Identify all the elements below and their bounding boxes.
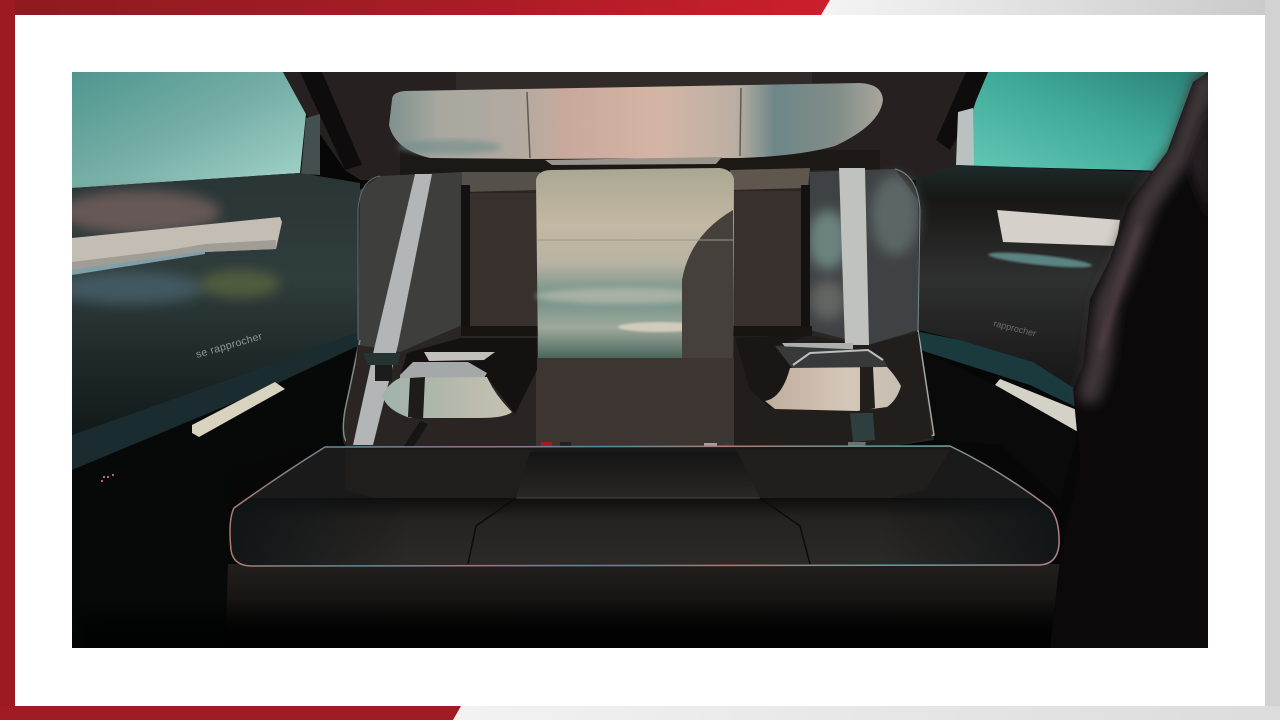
seat base bbox=[226, 564, 1060, 612]
door text: se rapprocher: se rapprocher bbox=[195, 330, 264, 361]
left window bbox=[72, 72, 306, 188]
right armrest block bbox=[735, 334, 901, 412]
centre backrest bbox=[535, 168, 734, 358]
lower centre seat back bbox=[536, 358, 734, 450]
door text: rapprocher: rapprocher bbox=[993, 318, 1037, 338]
left seat belt bbox=[353, 174, 432, 445]
right door panel bbox=[916, 165, 1150, 432]
seat back bbox=[342, 168, 934, 448]
dark vignette at bottom bbox=[226, 618, 1053, 632]
buckles bbox=[541, 442, 717, 446]
icon: door indicator dots bbox=[101, 474, 114, 482]
lower right seat back bbox=[812, 332, 932, 446]
right window bbox=[972, 72, 1208, 172]
seat cushion bbox=[225, 446, 1065, 566]
left door panel bbox=[72, 173, 360, 470]
left armrest block bbox=[382, 338, 537, 452]
right seat belt bbox=[839, 168, 875, 458]
photo: rear seat interior bbox=[55, 72, 1210, 665]
foreground front seat bbox=[1050, 72, 1210, 648]
lower left seat back bbox=[345, 345, 510, 446]
headrest bar bbox=[389, 83, 883, 165]
cabin ceiling and pillars bbox=[283, 72, 988, 180]
